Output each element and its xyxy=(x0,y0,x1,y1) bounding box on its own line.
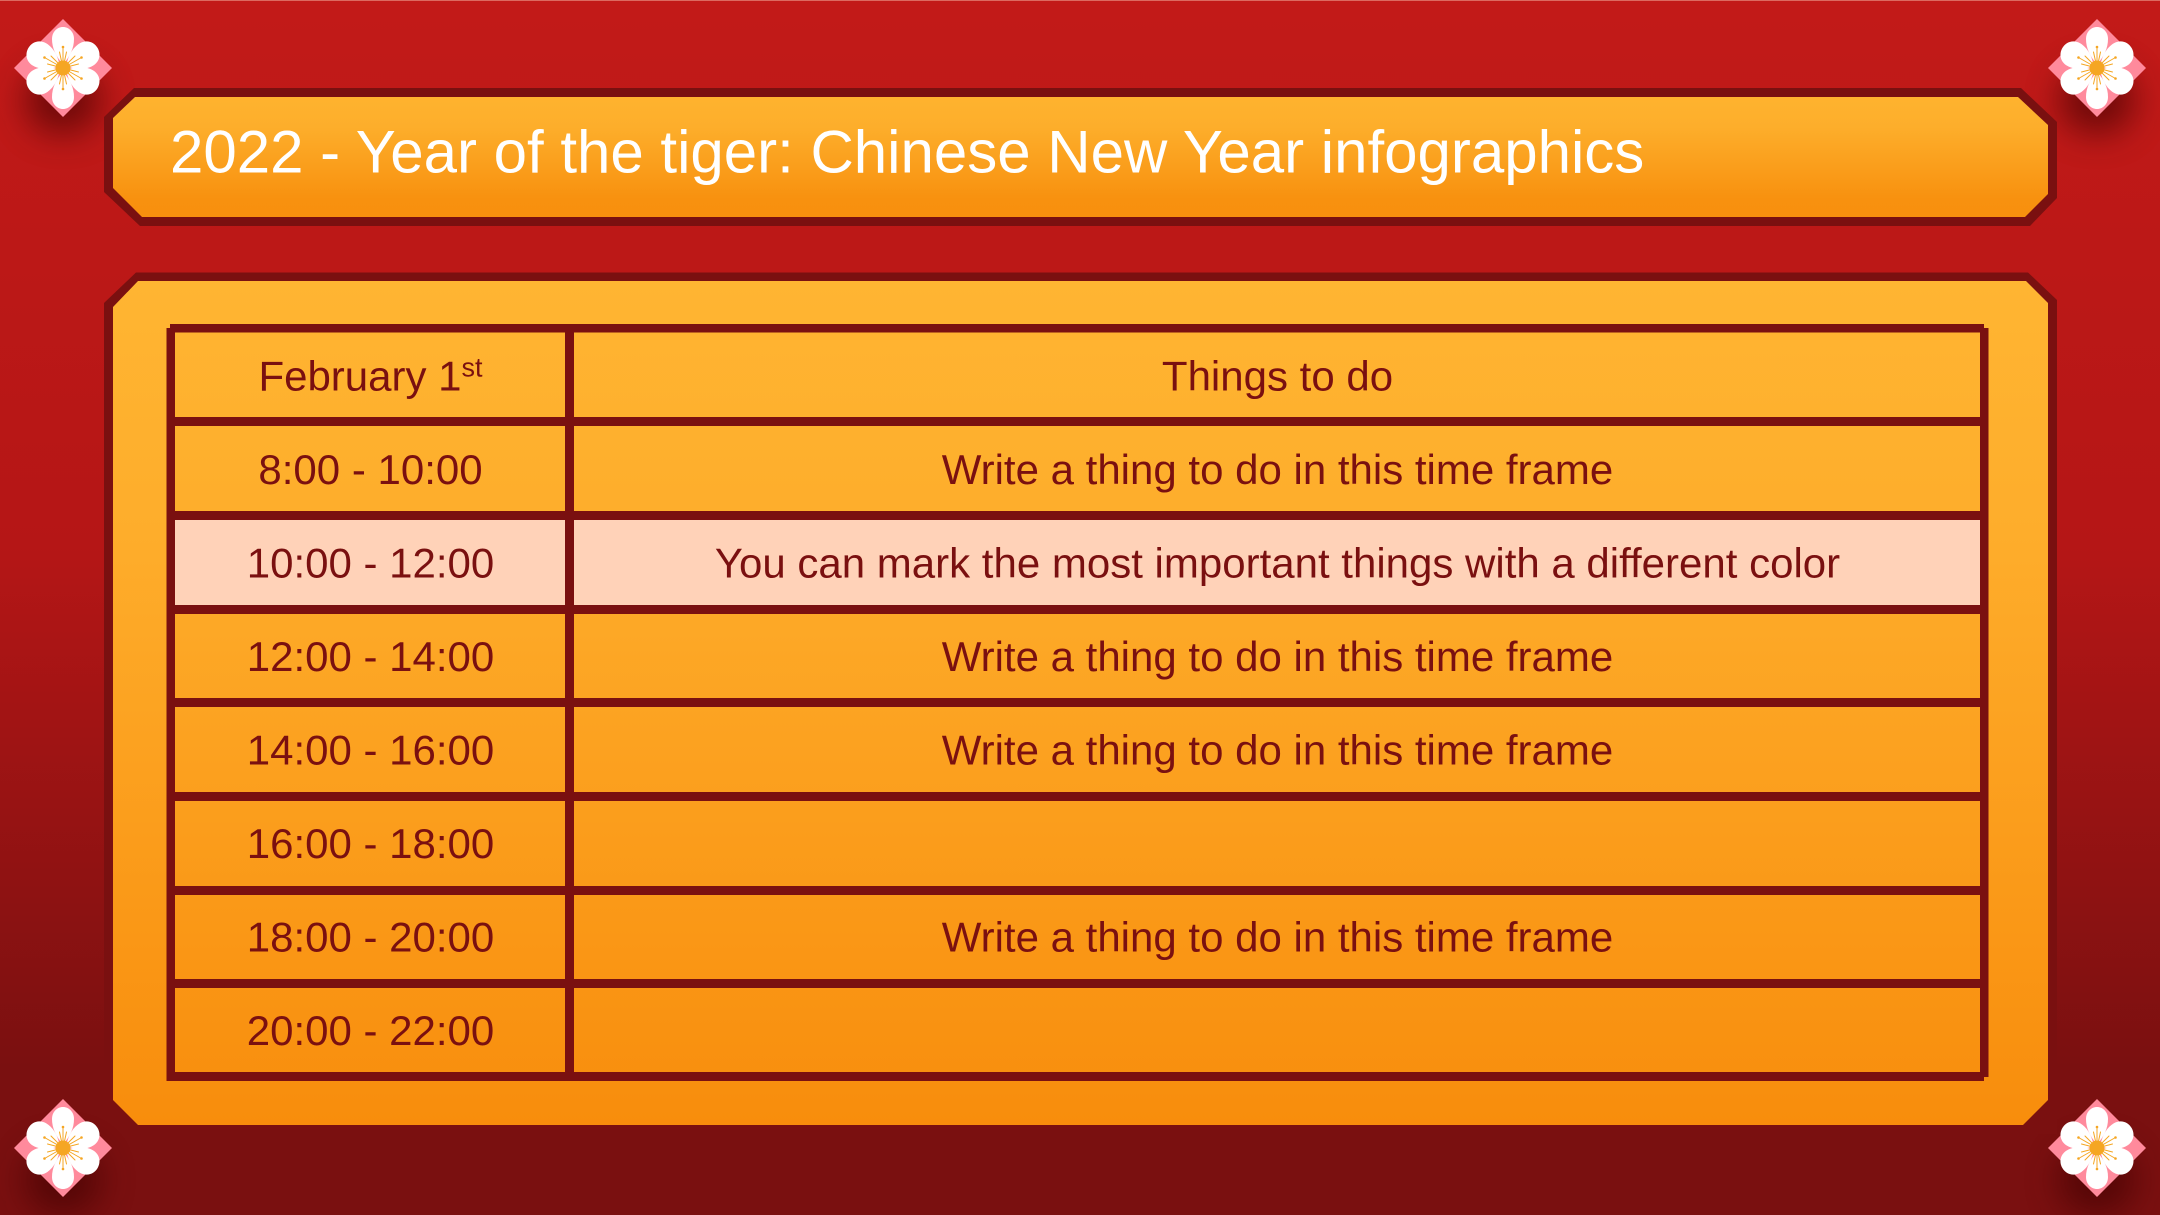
icon: flower top right xyxy=(2048,19,2146,134)
row 18:00 - 20:00: 18:00 - 20:00 xyxy=(247,914,494,960)
row 8:00 - 10:00: Write a thing to do in this time frame xyxy=(942,446,1613,493)
title: 2022 - Year of the tiger: Chinese New Year infographics xyxy=(170,118,1644,186)
row 8:00 - 10:00 xyxy=(258,446,1613,493)
row 14:00 - 16:00 xyxy=(247,726,1613,774)
header row: st xyxy=(462,352,483,382)
row 12:00 - 14:00: 12:00 - 14:00 xyxy=(247,633,494,680)
header row: Things to do xyxy=(1162,352,1393,400)
row 12:00 - 14:00: Write a thing to do in this time frame xyxy=(942,633,1613,680)
icon: flower bottom left xyxy=(14,1099,112,1214)
row 18:00 - 20:00 xyxy=(247,914,1613,960)
row 14:00 - 16:00: 14:00 - 16:00 xyxy=(247,726,494,774)
row 12:00 - 14:00 xyxy=(247,633,1613,680)
row 10:00 - 12:00 highlighted: 10:00 - 12:00 xyxy=(247,540,494,586)
row 20:00 - 22:00: 20:00 - 22:00 xyxy=(247,1007,494,1054)
header row: February 1 xyxy=(258,352,462,400)
highlighted row background xyxy=(170,515,1984,609)
row 8:00 - 10:00: 8:00 - 10:00 xyxy=(258,446,483,493)
icon: flower top left xyxy=(14,19,112,134)
icon: flower bottom right xyxy=(2048,1099,2146,1214)
title banner xyxy=(104,88,2057,226)
header row xyxy=(258,352,1393,400)
row 14:00 - 16:00: Write a thing to do in this time frame xyxy=(942,726,1613,774)
panel: schedule xyxy=(104,272,2057,1134)
row 18:00 - 20:00: Write a thing to do in this time frame xyxy=(942,914,1613,960)
row 16:00 - 18:00: 16:00 - 18:00 xyxy=(247,820,494,867)
table: daily schedule xyxy=(166,324,1988,1081)
row 10:00 - 12:00 highlighted: You can mark the most important things with a different color xyxy=(715,540,1840,586)
